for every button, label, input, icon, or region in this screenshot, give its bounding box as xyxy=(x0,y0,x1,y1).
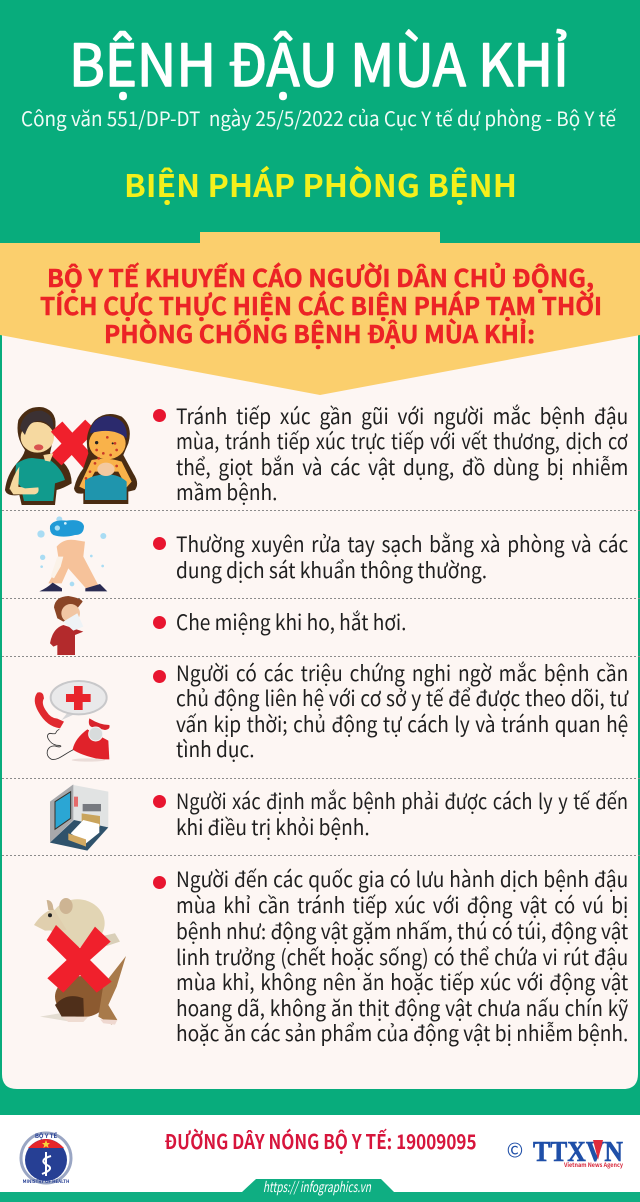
bullet item 5: Người xác định mắc bệnh phải được cách ly y tế đến xyxy=(176,786,628,816)
banner text: ministry recommendation: BỘ Y TẾ KHUYẾN CÁO NGƯỜI DÂN CHỦ ĐỘNG, xyxy=(47,259,594,294)
bullet item 3: Che miệng khi ho, hắt hơi. xyxy=(176,607,406,637)
icon: red telephone calling medical help xyxy=(35,681,110,762)
bullet item 6: mùa khỉ cần tránh tiếp xúc với động vật có vú bị xyxy=(176,890,628,920)
icon: person sneezing into tissue xyxy=(50,596,83,655)
heading: prevention measures: BIỆN PHÁP PHÒNG BỆNH xyxy=(124,161,517,206)
bullet item 1: thể, giọt bắn và các vật dụng, đồ dùng bị nhiễm xyxy=(176,452,628,482)
hotline: ĐƯỜNG DÂY NÓNG BỘ Y TẾ: 19009095 xyxy=(164,1126,476,1155)
bullet item 6: Người đến các quốc gia có lưu hành dịch bệnh đậu xyxy=(176,864,628,894)
bullet item 4: chủ động liên hệ với cơ sở y tế để được theo dõi, tư xyxy=(176,683,628,713)
bullet item 2 xyxy=(153,529,628,585)
banner text: ministry recommendation xyxy=(40,259,602,350)
bullet item 4 xyxy=(153,658,628,764)
icon: avoid contact with infected person xyxy=(5,407,137,505)
panel: cream content area xyxy=(2,320,638,1089)
logo: TTXVN news agency: TTXVN xyxy=(533,1136,623,1168)
logo: TTXVN news agency: Vietnam News Agency xyxy=(563,1160,623,1169)
panel: yellow arrow banner xyxy=(0,232,640,395)
website url: https:// infographics.vn xyxy=(263,1177,372,1197)
bullet item 6 xyxy=(153,864,628,1048)
bullet item 5: khi điều trị khỏi bệnh. xyxy=(176,812,370,842)
bullet item 6: hoang dã, không ăn thịt động vật chưa nấu chín kỹ xyxy=(176,993,628,1023)
icon: hand washing with soap xyxy=(37,516,107,591)
logo: Ministry of Health seal: BỘ Y TẾ xyxy=(35,1131,57,1140)
subtitle: official document reference: Công văn 551/DP-DT ngày 25/5/2022 của Cục Y tế dự phòng - Bộ Y tế xyxy=(21,103,617,132)
panel: white footer xyxy=(0,1115,640,1202)
logo: Ministry of Health seal: MINISTRY OF HEALTH xyxy=(23,1179,69,1185)
logo: Ministry of Health seal xyxy=(21,1131,71,1185)
bullet item 1: mùa, tránh tiếp xúc trực tiếp với vết thương, dịch cơ xyxy=(176,426,628,456)
bullet item 2: dung dịch sát khuẩn thông thường. xyxy=(176,555,487,585)
bullet item 1: Tránh tiếp xúc gần gũi với người mắc bệnh đậu xyxy=(176,401,628,431)
bullet item 6: hoặc ăn các sản phẩm của động vật bị nhiễm bệnh. xyxy=(176,1018,628,1048)
footer green bar with URL tab xyxy=(0,1179,640,1202)
copyright symbol: © xyxy=(507,1134,523,1163)
bullet item 4: Người có các triệu chứng nghi ngờ mắc bệnh cần xyxy=(176,658,628,688)
bullet item 6: mùa khỉ, không nên ăn hoặc tiếp xúc với động vật xyxy=(176,967,628,997)
banner text: ministry recommendation: TÍCH CỰC THỰC HIỆN CÁC BIỆN PHÁP TẠM THỜI xyxy=(40,287,602,322)
bullet item 1 xyxy=(153,401,628,507)
bullet item 5 xyxy=(153,786,628,842)
bullet item 6: bệnh như: động vật gặm nhấm, thú có túi, động vật xyxy=(176,916,628,946)
bullet item 6: linh trưởng (chết hoặc sống) có thể chứa vi rút đậu xyxy=(176,942,628,972)
title: BỆNH ĐẬU MÙA KHỈ xyxy=(69,19,569,103)
bullet item 1: mầm bệnh. xyxy=(176,477,277,507)
icon: rodent crossed out xyxy=(34,898,126,1025)
icon: isolation hospital room xyxy=(50,784,108,851)
bullet item 4: tình dục. xyxy=(176,734,255,764)
bullet item 4: vấn kịp thời; chủ động tự cách ly và tránh quan hệ xyxy=(176,709,628,739)
banner text: ministry recommendation: PHÒNG CHỐNG BỆNH ĐẬU MÙA KHỈ: xyxy=(104,315,535,350)
bullet item 2: Thường xuyên rửa tay sạch bằng xà phòng và các xyxy=(176,529,628,559)
